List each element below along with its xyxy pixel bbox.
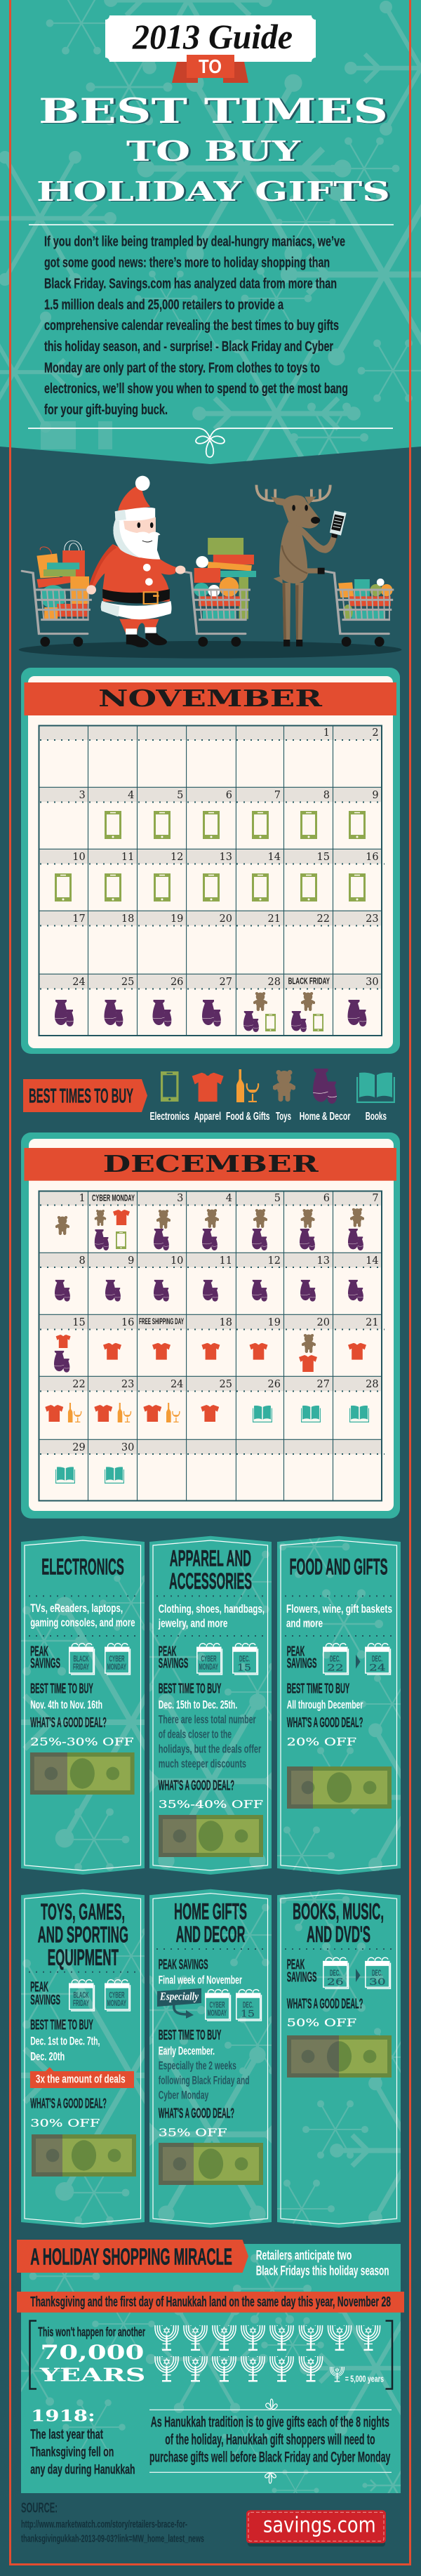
date numbers: November: 19 bbox=[171, 913, 183, 925]
calendar icon: Dec 15: 15 bbox=[241, 2009, 255, 2020]
date numbers: December: 27 bbox=[317, 1379, 330, 1390]
cart 3 with gifts bbox=[323, 571, 394, 647]
panel: Food and Gifts bbox=[277, 1536, 401, 1875]
intro paragraph: 1.5 million deals and 25,000 retailers to provide a bbox=[44, 297, 284, 312]
calendar icon: Black Friday: FRIDAY bbox=[73, 1998, 89, 2008]
best time to buy: Early December. bbox=[159, 2045, 215, 2058]
note: There are less total number bbox=[159, 1712, 256, 1726]
date numbers: November: 17 bbox=[72, 913, 86, 925]
date numbers: November: 10 bbox=[72, 852, 86, 863]
ribbon: TO: TO bbox=[199, 55, 222, 77]
fact: 1918: any day during Hanukkah bbox=[30, 2462, 135, 2477]
intro paragraph: Monday are only part of the story. From clothes to toys to bbox=[44, 360, 320, 376]
heading: TOYS, GAMES, bbox=[41, 1899, 125, 1924]
panel: Food and Gifts: SAVINGS bbox=[287, 1656, 317, 1672]
date numbers: November: 30 bbox=[366, 977, 379, 988]
date numbers: December: 4 bbox=[226, 1193, 232, 1204]
date numbers: November: 14 bbox=[268, 852, 281, 863]
calendar icon: Dec 26: 26 bbox=[327, 1977, 344, 1988]
heading: AND SPORTING bbox=[38, 1922, 128, 1948]
calendar icon: Cyber Monday: CYBER bbox=[201, 1654, 217, 1664]
date numbers: November: BLACK FRIDAY bbox=[288, 977, 330, 986]
title ticket: 2013 Guide bbox=[105, 15, 316, 62]
icon: money bbox=[159, 2143, 263, 2185]
peak savings: PEAK SAVINGS bbox=[159, 1957, 208, 1972]
date numbers: November: 3 bbox=[79, 790, 86, 801]
panel: Toys, Games, and Sporting Equipment: SAVINGS bbox=[30, 1993, 60, 2008]
note: Cyber Monday bbox=[159, 2088, 209, 2101]
cart 2 with gifts bbox=[180, 538, 256, 647]
calendar icon: Dec 26 bbox=[323, 1957, 348, 1988]
red bar: Thanksgiving and Hanukkah bbox=[17, 2292, 404, 2313]
cart 1 with bags bbox=[22, 541, 93, 647]
panel: Electronics: SAVINGS bbox=[30, 1656, 60, 1672]
peak savings: PEAK bbox=[159, 1644, 177, 1659]
intro paragraph: for your gift-buying buck. bbox=[44, 402, 168, 418]
fact: Hanukkah gift shoppers bbox=[149, 2399, 392, 2483]
calendar icon: Black Friday: BLACK bbox=[73, 1990, 89, 2000]
heading arrow bbox=[17, 2240, 248, 2273]
best time to buy bbox=[287, 1682, 363, 1711]
source: http://www.marketwatch.com/story/retailers-brace-for- bbox=[21, 2518, 187, 2530]
date numbers: November: 11 bbox=[121, 852, 134, 863]
best time to buy: BEST TIME TO BUY bbox=[30, 1682, 93, 1697]
panel: header teal banner bbox=[0, 0, 421, 488]
heading bbox=[169, 1546, 252, 1594]
calendar icon: Dec 15: DEC. bbox=[239, 1654, 250, 1664]
icons: Dec 8-14 home bbox=[55, 1280, 363, 1302]
fact: 1918: Thanksgiving fell on bbox=[30, 2445, 114, 2459]
peak savings: Final week of November bbox=[159, 1974, 242, 1987]
date numbers: December: 13 bbox=[317, 1255, 330, 1267]
calendar icon: Black Friday bbox=[69, 1644, 94, 1675]
heading: HOME GIFTS bbox=[174, 1898, 247, 1924]
ribbon: TO bbox=[172, 55, 248, 83]
best time to buy: BEST TIME TO BUY bbox=[287, 1682, 350, 1697]
calendar icon: Cyber Monday: CYBER bbox=[209, 2000, 225, 2010]
icon: money bbox=[287, 2035, 392, 2078]
date numbers: December: 7 bbox=[372, 1193, 379, 1204]
icon: money bbox=[30, 1752, 135, 1795]
stat: 70,000 years: YEARS bbox=[39, 2365, 145, 2386]
calendar icon: Dec 15: DEC. bbox=[243, 2000, 253, 2010]
date numbers: November: 18 bbox=[121, 913, 134, 925]
panel: Apparel and Accessories: SAVINGS bbox=[159, 1656, 188, 1672]
icon: money bbox=[287, 1766, 392, 1809]
grid: November days bbox=[39, 725, 385, 1036]
date numbers: November: 5 bbox=[177, 790, 183, 801]
date numbers: December: 11 bbox=[220, 1255, 232, 1267]
date numbers: November: 7 bbox=[274, 790, 281, 801]
description: Clothing, shoes, handbags, bbox=[159, 1602, 265, 1616]
date numbers: December: 16 bbox=[121, 1317, 134, 1328]
icons: Dec 29-30 books bbox=[56, 1467, 123, 1483]
fact: 1918: The last year that bbox=[30, 2427, 103, 2442]
logo: savings.com bbox=[246, 2510, 386, 2547]
date numbers: November: 12 bbox=[171, 852, 183, 863]
calendar icon: Dec 15 bbox=[236, 1990, 261, 2021]
legend labels: Books bbox=[366, 1111, 387, 1123]
legend labels: Apparel bbox=[194, 1111, 221, 1123]
callout: 3x the amount of deals bbox=[30, 2067, 134, 2088]
title: Best Times to Buy Holiday Gifts: HOLIDAY GIFTS bbox=[36, 176, 390, 207]
good deal: 20% OFF bbox=[287, 1736, 356, 1748]
panel: Home Gifts and Decor: BEST TIME TO BUY bbox=[159, 2028, 222, 2043]
date numbers: December: 15 bbox=[72, 1317, 86, 1328]
description: gaming consoles, and more bbox=[30, 1616, 135, 1630]
calendar icon: Cyber Monday bbox=[206, 1990, 230, 2021]
date numbers: December: 18 bbox=[220, 1317, 232, 1328]
date numbers: November: 28 bbox=[268, 977, 281, 988]
icons: Dec 22-28 apparel, food and books bbox=[45, 1403, 368, 1422]
peak savings: PEAK bbox=[30, 1644, 48, 1659]
heading bbox=[174, 1898, 247, 1947]
good deal bbox=[159, 2106, 234, 2139]
icon: money bbox=[159, 1815, 263, 1857]
date numbers: December bbox=[72, 1193, 379, 1453]
date numbers: December: 20 bbox=[317, 1317, 330, 1328]
good deal: 25%-30% OFF bbox=[30, 1736, 134, 1748]
heading: ACCESSORIES bbox=[169, 1568, 252, 1594]
panel: Toys, Games, and Sporting Equipment bbox=[21, 1889, 145, 2228]
date numbers: December: 6 bbox=[323, 1193, 330, 1204]
peak savings bbox=[159, 1957, 242, 1987]
date numbers: December: FREE SHIPPING DAY bbox=[139, 1318, 184, 1326]
tag: especially with arrow bbox=[157, 1988, 201, 2019]
legend labels bbox=[150, 1111, 387, 1123]
heading: December bbox=[24, 1148, 396, 1181]
good deal: 35% OFF bbox=[159, 2126, 227, 2139]
calendar icon: Cyber Monday bbox=[105, 1644, 131, 1675]
heading bbox=[293, 1898, 384, 1947]
date numbers: November: 2 bbox=[372, 727, 379, 739]
pictogram key: = 5,000 years bbox=[345, 2374, 384, 2384]
date numbers: December: 30 bbox=[121, 1442, 134, 1453]
calendar icon: Dec 24: 24 bbox=[369, 1663, 386, 1674]
retailers note: Retailers anticipate two bbox=[256, 2249, 352, 2264]
date numbers: November: 25 bbox=[121, 977, 134, 988]
calendar icon: Dec 22: 22 bbox=[327, 1663, 344, 1674]
calendar icon: Cyber Monday: MONDAY bbox=[107, 1998, 126, 2008]
stat: 70,000 years: 70,000 bbox=[40, 2341, 145, 2364]
peak savings bbox=[287, 1957, 317, 1986]
good deal bbox=[287, 1997, 363, 2029]
peak savings: PEAK bbox=[30, 1980, 48, 1995]
calendar icon: Dec 15 bbox=[233, 1644, 258, 1675]
stat: 70,000 years: This won't happen for another bbox=[38, 2325, 145, 2339]
date numbers: December: CYBER MONDAY bbox=[92, 1194, 135, 1203]
date numbers: November: 22 bbox=[317, 913, 330, 925]
note: holidays, but the deals offer bbox=[159, 1743, 262, 1756]
calendar icon: Cyber Monday: MONDAY bbox=[199, 1662, 218, 1672]
calendar icon: Dec 22 bbox=[323, 1644, 348, 1675]
note bbox=[159, 2059, 250, 2101]
title: Best Times to Buy Holiday Gifts bbox=[36, 91, 390, 207]
panel: Home Gifts and Decor bbox=[149, 1889, 272, 2228]
heading arrow: A HOLIDAY SHOPPING MIRACLE bbox=[30, 2244, 232, 2270]
heading: AND DECOR bbox=[176, 1922, 245, 1947]
date numbers: November: 21 bbox=[268, 913, 281, 925]
source bbox=[21, 2500, 204, 2545]
icons: Dec 15-21 apparel bbox=[54, 1334, 366, 1373]
best time to buy: BEST TIME TO BUY bbox=[30, 2018, 93, 2033]
date numbers: November bbox=[72, 727, 379, 988]
date numbers: December: 14 bbox=[366, 1255, 379, 1267]
best time to buy: Dec. 20th bbox=[30, 2049, 65, 2063]
brackets bbox=[29, 2321, 392, 2389]
pictogram: menorahs bbox=[155, 2325, 380, 2382]
calendar icon: Dec 30 bbox=[366, 1957, 390, 1988]
calendar icon: Cyber Monday: CYBER bbox=[109, 1990, 125, 2000]
intro paragraph bbox=[44, 235, 348, 418]
date numbers: November: 13 bbox=[220, 852, 232, 863]
peak savings bbox=[30, 1980, 60, 2008]
peak savings bbox=[159, 1644, 188, 1672]
date numbers: December: 24 bbox=[171, 1379, 183, 1390]
calendar icon: Cyber Monday bbox=[105, 1980, 131, 2011]
panel: Home Gifts and Decor: WHAT'S A GOOD DEAL? bbox=[159, 2106, 234, 2122]
fact: 1918 bbox=[30, 2407, 135, 2477]
heading: ELECTRONICS bbox=[41, 1554, 124, 1579]
peak savings: PEAK bbox=[287, 1644, 305, 1659]
good deal: 50% OFF bbox=[287, 2016, 356, 2029]
panel: December calendar bbox=[21, 1132, 400, 1519]
best time to buy: BEST TIME TO BUY bbox=[159, 1682, 222, 1697]
calendar icon: Black Friday: BLACK bbox=[73, 1654, 89, 1664]
note: of deals closer to the bbox=[159, 1727, 232, 1741]
date numbers: December: 28 bbox=[366, 1379, 379, 1390]
heading: December: DECEMBER bbox=[103, 1150, 319, 1177]
description: jewelry, and more bbox=[158, 1617, 227, 1630]
panel: Toys, Games, and Sporting Equipment: WHAT'S A GOOD DEAL? bbox=[30, 2096, 107, 2112]
note bbox=[159, 1712, 262, 1771]
calendar icon: Dec 30: 30 bbox=[369, 1977, 386, 1988]
heading: EQUIPMENT bbox=[48, 1945, 119, 1970]
date numbers: November: 9 bbox=[372, 790, 379, 801]
date numbers: November: 20 bbox=[220, 913, 232, 925]
callout: 3x the amount of deals: 3x the amount of deals bbox=[36, 2073, 126, 2086]
description: and more bbox=[286, 1617, 323, 1630]
date numbers: December: 10 bbox=[171, 1255, 183, 1267]
panel: November calendar bbox=[21, 668, 400, 1054]
good deal: WHAT'S A GOOD DEAL? bbox=[30, 1715, 107, 1731]
legend labels: Home & Decor bbox=[300, 1111, 350, 1123]
arrow bbox=[356, 1655, 361, 1669]
good deal bbox=[159, 1778, 263, 1811]
calendar icon: Dec 30: DEC. bbox=[372, 1968, 382, 1978]
date numbers: December: 25 bbox=[220, 1379, 232, 1390]
good deal bbox=[287, 1715, 363, 1748]
date numbers: December: 26 bbox=[268, 1379, 281, 1390]
note: following Black Friday and bbox=[159, 2073, 250, 2087]
best time to buy bbox=[30, 2018, 100, 2063]
calendar icon: Cyber Monday: MONDAY bbox=[107, 1662, 126, 1672]
date numbers: December: 19 bbox=[268, 1317, 281, 1328]
date numbers: December: 12 bbox=[268, 1255, 281, 1267]
good deal: 30% OFF bbox=[30, 2117, 100, 2129]
panel: Books, Music, and DVD's bbox=[277, 1889, 401, 2228]
legend labels: Food & Gifts bbox=[226, 1111, 270, 1123]
good deal: WHAT'S A GOOD DEAL? bbox=[159, 1778, 234, 1793]
icons: electronics Nov 4-16 bbox=[55, 811, 366, 901]
legend arrow label bbox=[23, 1079, 147, 1112]
date numbers: November: 24 bbox=[72, 977, 86, 988]
date numbers: December: 9 bbox=[128, 1255, 134, 1267]
divider with bow bbox=[28, 428, 393, 457]
date numbers: November: 15 bbox=[317, 852, 330, 863]
best time to buy: Dec. 1st to Dec. 7th, bbox=[30, 2034, 100, 2047]
best time to buy: Nov. 4th to Nov. 16th bbox=[30, 1698, 102, 1711]
description bbox=[286, 1602, 392, 1630]
date numbers: December: 29 bbox=[72, 1442, 86, 1453]
best time to buy bbox=[159, 2028, 222, 2058]
panel: A Holiday Shopping Miracle bbox=[17, 2240, 404, 2493]
best time to buy bbox=[159, 1682, 237, 1711]
calendar icon: Dec 15: 15 bbox=[237, 1663, 251, 1674]
date numbers: December: 22 bbox=[72, 1379, 86, 1390]
peak savings: PEAK bbox=[287, 1957, 305, 1972]
calendar icon: Cyber Monday bbox=[197, 1644, 222, 1675]
calendar icon: Dec 24: DEC. bbox=[372, 1654, 382, 1664]
icons: Dec 1-7 toys and home bbox=[57, 1208, 363, 1250]
description bbox=[158, 1602, 265, 1630]
description: TVs, eReaders, laptops, bbox=[30, 1601, 123, 1615]
note: much steeper discounts bbox=[159, 1757, 246, 1771]
good deal bbox=[30, 2096, 107, 2129]
ground shadow bbox=[19, 641, 401, 659]
note: Especially the 2 weeks bbox=[159, 2059, 236, 2072]
source: SOURCE: bbox=[21, 2500, 58, 2516]
legend arrow label: BEST TIMES TO BUY bbox=[29, 1085, 133, 1108]
calendar icon: Cyber Monday: CYBER bbox=[109, 1654, 125, 1664]
source: thanksgivingukkah-2013-09-03?link=MW_home_latest_news bbox=[21, 2533, 204, 2545]
stat: 70,000 years bbox=[38, 2325, 145, 2386]
peak savings bbox=[30, 1644, 60, 1672]
legend: best times to buy bbox=[23, 1069, 394, 1123]
calendar icon: Cyber Monday: MONDAY bbox=[208, 2008, 227, 2018]
Santa bbox=[86, 476, 185, 647]
heading: November bbox=[24, 682, 396, 715]
legend labels: Toys bbox=[276, 1111, 291, 1123]
best time to buy: Dec. 15th to Dec. 25th. bbox=[159, 1698, 237, 1711]
heading: November: NOVEMBER bbox=[98, 685, 323, 712]
date numbers: December: 5 bbox=[274, 1193, 281, 1204]
date numbers: November: 4 bbox=[128, 790, 134, 801]
panel: Apparel and Accessories bbox=[149, 1536, 272, 1875]
title ticket: 2013 Guide: 2013 Guide bbox=[132, 17, 293, 56]
date numbers: November: 23 bbox=[366, 913, 379, 925]
date numbers: November: 8 bbox=[323, 790, 330, 801]
title: Best Times to Buy Holiday Gifts: BEST TIMES bbox=[39, 91, 388, 131]
calendar icon: Black Friday: FRIDAY bbox=[73, 1662, 89, 1672]
heading bbox=[38, 1899, 128, 1970]
calendar icon: Dec 22: DEC. bbox=[330, 1654, 340, 1664]
grid: December days bbox=[39, 1191, 385, 1501]
date numbers: November: 26 bbox=[171, 977, 183, 988]
date numbers: November: 6 bbox=[226, 790, 232, 801]
date numbers: December: 1 bbox=[79, 1193, 86, 1204]
pictogram key bbox=[330, 2367, 384, 2384]
date numbers: December: 8 bbox=[79, 1255, 86, 1267]
panel: Electronics bbox=[21, 1536, 145, 1875]
date numbers: November: 1 bbox=[323, 727, 330, 739]
calendar icon: Dec 24 bbox=[366, 1644, 390, 1675]
arrow bbox=[356, 1969, 361, 1982]
retailers note bbox=[256, 2249, 389, 2279]
good deal: 35%-40% OFF bbox=[159, 1798, 263, 1811]
panel: Books, Music, and DVD's: SAVINGS bbox=[287, 1970, 317, 1986]
legend icons bbox=[161, 1069, 394, 1104]
logo: savings.com: savings.com bbox=[263, 2514, 376, 2538]
description bbox=[30, 1601, 135, 1630]
reindeer bbox=[256, 485, 347, 647]
date numbers: December: 3 bbox=[177, 1193, 183, 1204]
good deal bbox=[30, 1715, 134, 1748]
peak savings bbox=[287, 1644, 317, 1672]
calendar icon: Dec 26: DEC. bbox=[330, 1968, 340, 1978]
tag: especially with arrow: Especially bbox=[159, 1991, 199, 2002]
date numbers: December: 21 bbox=[366, 1317, 379, 1328]
heading: APPAREL AND bbox=[170, 1546, 251, 1571]
icons: Nov 24-30 home, toys, electronics bbox=[55, 992, 366, 1032]
illustration: Santa and reindeer shopping bbox=[19, 476, 401, 659]
date numbers: November: 16 bbox=[366, 852, 379, 863]
calendar icon: Black Friday bbox=[69, 1980, 94, 2011]
fact: 1918: 1918: bbox=[31, 2407, 95, 2425]
title: Best Times to Buy Holiday Gifts: TO BUY bbox=[126, 136, 302, 168]
best time to buy bbox=[30, 1682, 102, 1711]
date numbers: November: 27 bbox=[220, 977, 232, 988]
icon: money bbox=[32, 2134, 136, 2177]
best time to buy: All through December bbox=[287, 1698, 363, 1711]
legend labels: Electronics bbox=[150, 1111, 189, 1123]
date numbers: December: 23 bbox=[121, 1379, 134, 1390]
